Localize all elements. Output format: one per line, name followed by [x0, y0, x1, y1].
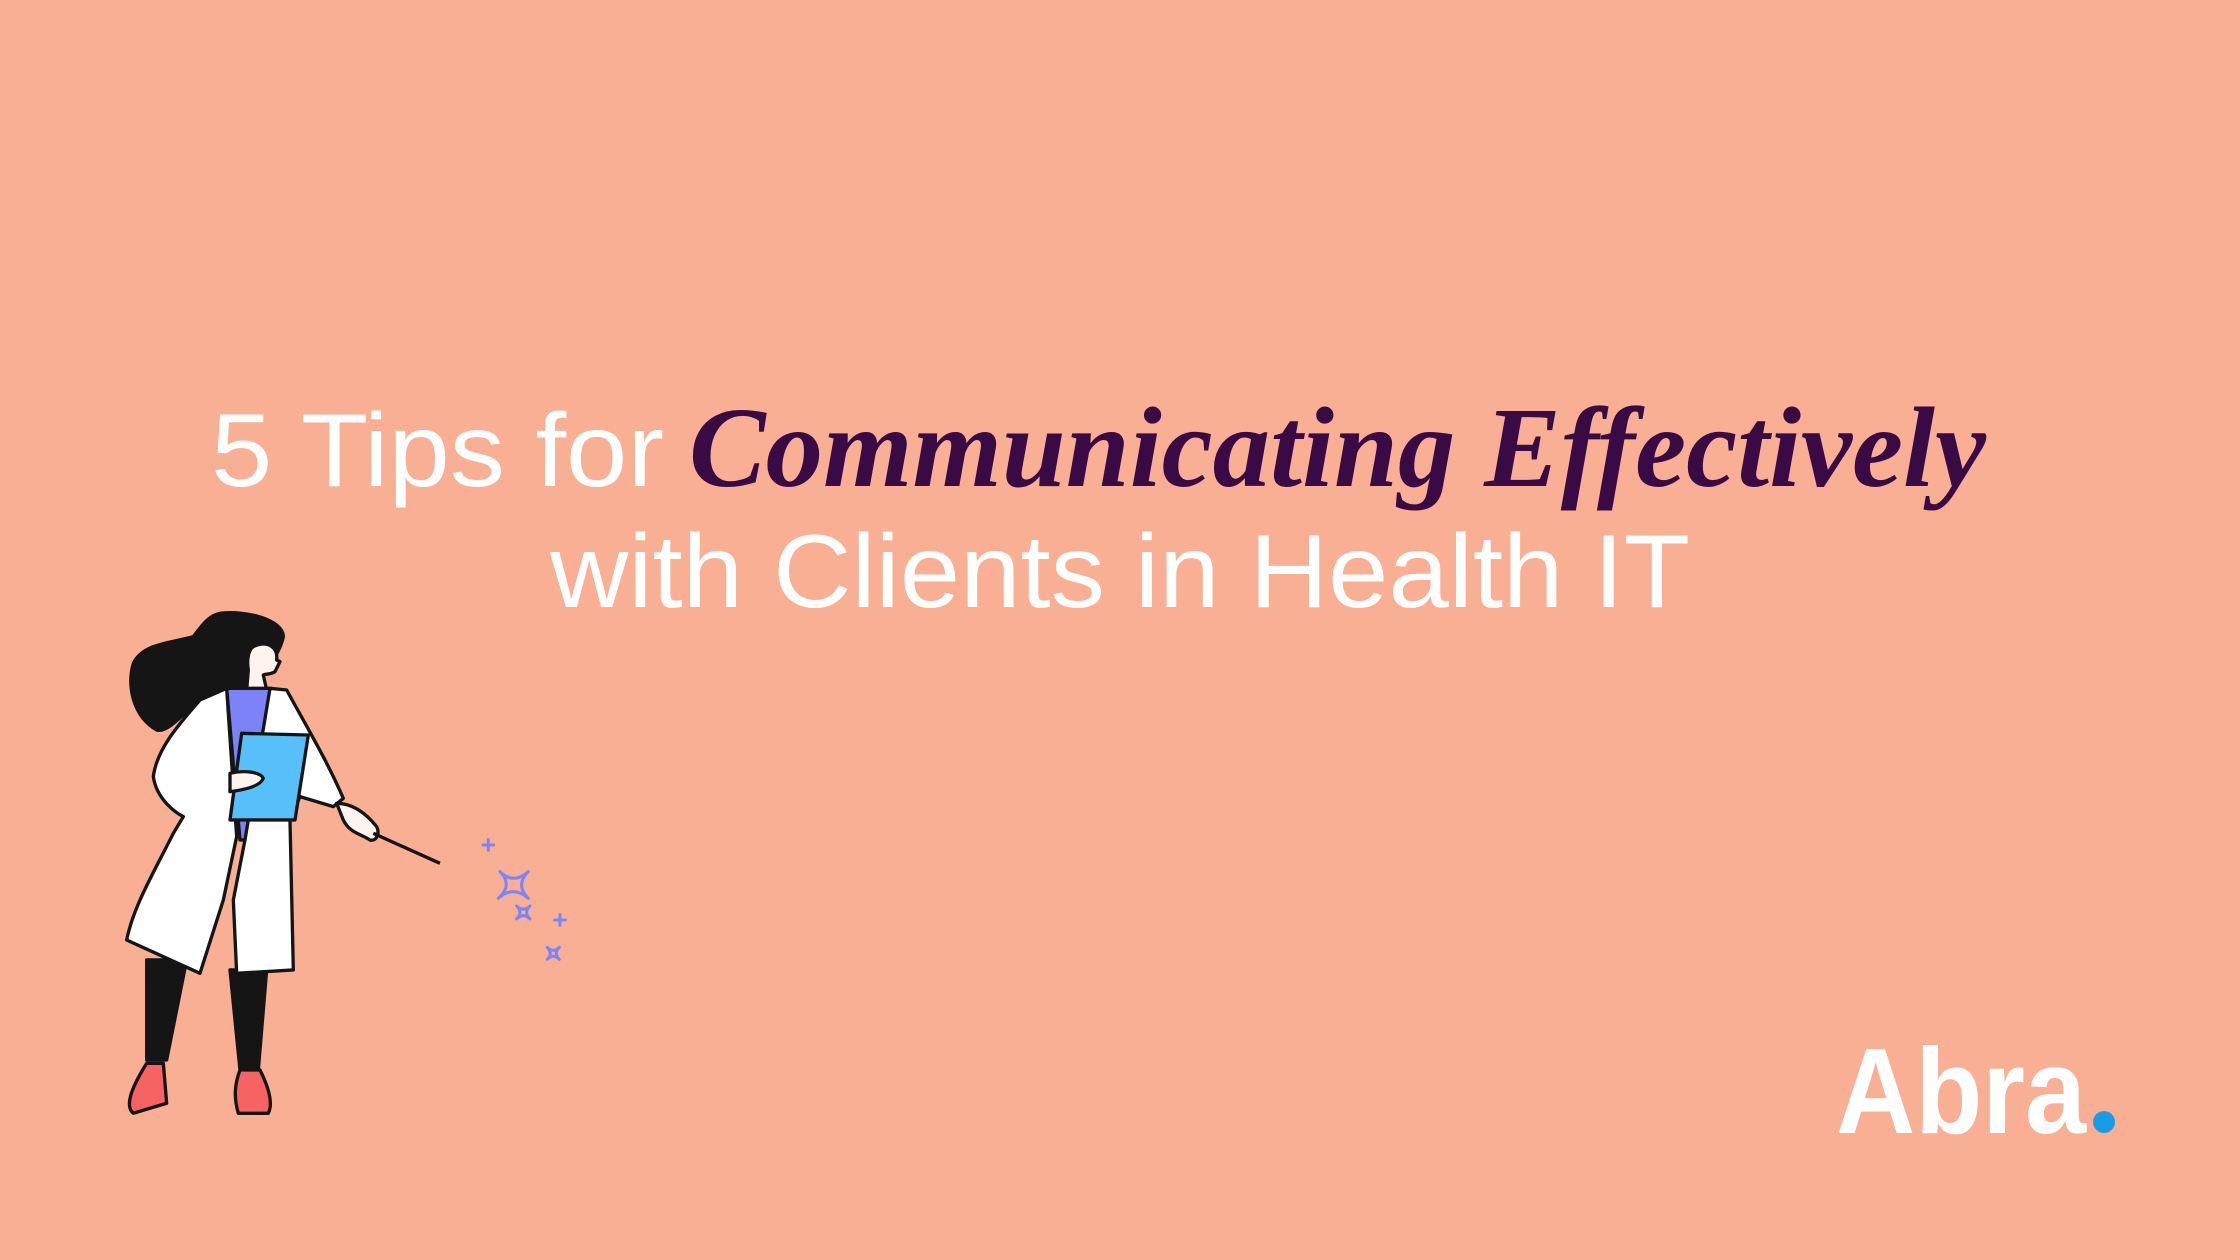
logo: Abra: Abra — [1836, 1023, 2087, 1159]
coat — [127, 688, 343, 973]
face — [247, 644, 280, 690]
clipboard — [230, 733, 308, 820]
shoes — [129, 1063, 270, 1113]
sparkles — [482, 838, 567, 959]
title: with Clients in Health IT — [549, 514, 1690, 630]
title: Communicating Effectively — [689, 384, 1986, 511]
illustration: doctor with pointer — [127, 613, 567, 1113]
pointer stick — [373, 833, 440, 863]
hair — [131, 613, 283, 730]
shirt — [227, 688, 270, 840]
title — [211, 384, 1986, 630]
title: 5 Tips for — [211, 393, 664, 509]
legs — [147, 960, 267, 1070]
hands — [230, 772, 378, 840]
